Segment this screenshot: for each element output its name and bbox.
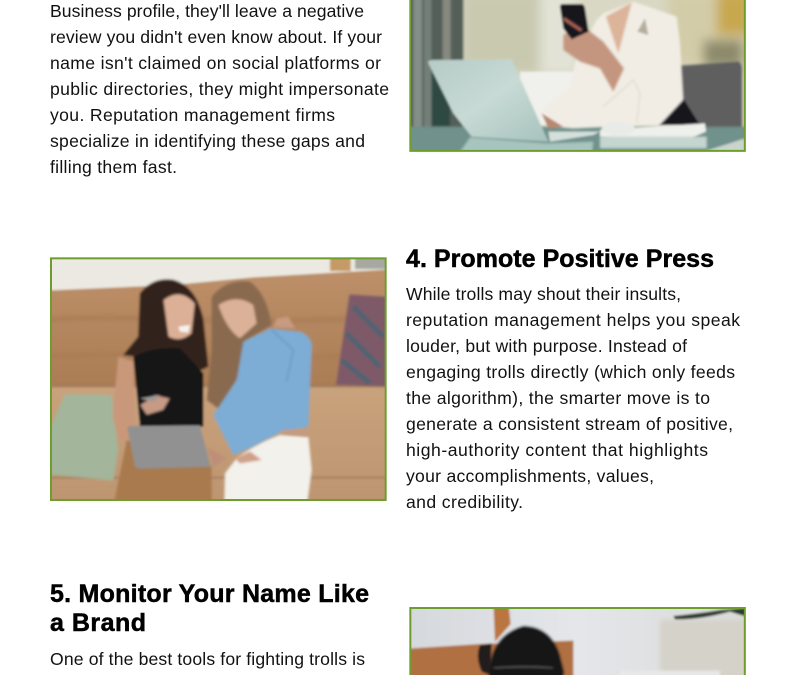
- curtain: [411, 0, 465, 129]
- text block: section 3 closing paragraph: specialize in identifying these gaps and: [50, 131, 365, 151]
- heading: Monitor Your Name Like a Brand: [50, 580, 369, 637]
- laptop: [428, 59, 548, 142]
- photo: woman with phone and laptop: [403, 0, 752, 158]
- skirt: [658, 98, 700, 125]
- wood back wall: [44, 269, 392, 387]
- paragraph: section 4 body: and credibility.: [406, 492, 523, 512]
- paragraph: section 4 body: [406, 284, 740, 512]
- green pillow: [44, 394, 118, 481]
- arm and hand: [563, 25, 624, 92]
- chair: [677, 62, 742, 133]
- heading: Monitor Your Name Like a Brand: 5. Monitor Your Name Like: [50, 580, 369, 608]
- phone: [560, 4, 589, 39]
- photo: two women laughing on a bench with a laptop: [44, 252, 392, 507]
- papers and cup: [598, 122, 708, 138]
- blouse: [542, 2, 683, 128]
- paragraph: section 4 body: engaging trolls directly (which only feeds: [406, 362, 735, 382]
- striped pillow: [336, 294, 392, 387]
- heading: Monitor Your Name Like a Brand: a Brand: [50, 609, 146, 637]
- text block: section 3 closing paragraph: Business profile, they'll leave a negative: [50, 1, 364, 21]
- text block: section 3 closing paragraph: name isn't claimed on social platforms or: [50, 53, 381, 73]
- blonde woman: [207, 281, 312, 507]
- text block: section 3 closing paragraph: you. Reputation management firms: [50, 105, 335, 125]
- photo frame: [51, 258, 386, 500]
- paragraph: section 4 body: high-authority content that highlights: [406, 440, 708, 460]
- photo frame: [410, 608, 745, 675]
- paragraph: section 4 body: reputation management helps you speak: [406, 310, 740, 330]
- heading: Promote Positive Press: 4. Promote Positive Press: [406, 245, 714, 273]
- text block: section 3 closing paragraph: public directories, they might impersonate: [50, 79, 389, 99]
- paragraph: section 4 body: generate a consistent stream of positive,: [406, 414, 733, 434]
- paragraph: section 5 body: One of the best tools for fighting trolls is: [50, 649, 365, 669]
- blue sweater: [213, 328, 312, 455]
- photo: woman with dark hair, seen from above: [409, 607, 746, 675]
- table: [411, 125, 744, 150]
- dark-haired woman: [113, 279, 212, 507]
- laptop: [127, 425, 211, 469]
- text block: section 3 closing paragraph: [50, 1, 389, 177]
- white trousers: [224, 435, 312, 507]
- paragraph: section 4 body: the algorithm), the smarter move is to: [406, 388, 710, 408]
- photo frame: [410, 0, 745, 151]
- paragraph: section 4 body: louder, but with purpose. Instead of: [406, 336, 687, 356]
- text block: section 3 closing paragraph: review you didn't even know about. If your: [50, 27, 382, 47]
- text block: section 5: [50, 580, 369, 669]
- paragraph: section 4 body: your accomplishments, values,: [406, 466, 654, 486]
- text block: section 4: [406, 245, 740, 512]
- wood bench: [52, 386, 385, 499]
- paragraph: section 4 body: While trolls may shout their insults,: [406, 284, 681, 304]
- text block: section 3 closing paragraph: filling them fast.: [50, 157, 177, 177]
